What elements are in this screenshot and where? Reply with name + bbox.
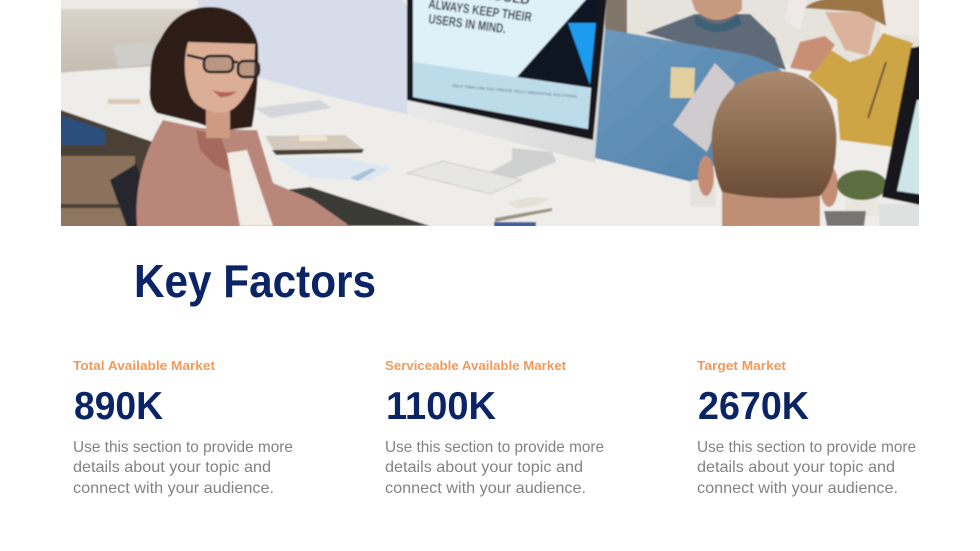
description: connect with your audience.: [385, 480, 586, 497]
chair: [110, 164, 140, 226]
column: target market: [697, 358, 916, 497]
description: Use this section to provide more: [73, 439, 293, 456]
label: Total Available Market: [73, 358, 216, 373]
label: Serviceable Available Market: [385, 358, 567, 373]
right monitor: [879, 45, 919, 226]
column: total available market: [73, 358, 293, 497]
pen cup: [690, 180, 716, 207]
description: Use this section to provide more: [697, 439, 916, 456]
column: serviceable available market: [385, 358, 604, 497]
value: 2670K: [698, 385, 809, 428]
woman with glasses: [137, 7, 350, 230]
desk surface: [61, 66, 152, 76]
sticky note: [670, 67, 695, 98]
description: [73, 439, 293, 497]
woman in yellow hoodie: [785, 0, 913, 147]
description: [697, 439, 916, 497]
description: details about your topic and: [697, 459, 895, 476]
description: Use this section to provide more: [385, 439, 604, 456]
folded cloth on shelf: [114, 42, 158, 68]
title: Key Factors: [134, 255, 376, 307]
patterned paper: [673, 63, 735, 152]
description: [385, 439, 604, 497]
desk plant: [824, 170, 887, 226]
value: 890K: [74, 385, 163, 428]
man in grey shirt: [645, 0, 786, 70]
man's head from behind: [698, 71, 838, 230]
photo: office team at desks: [55, 0, 925, 230]
desk papers and tablet: [108, 99, 392, 181]
label: Target Market: [697, 358, 787, 373]
keyboard and mouse: [407, 161, 552, 227]
computer monitor: ONLY THEN CAN YOU CREATE TRULY INNOVATIVE SOLUTIONS.: [452, 83, 578, 99]
description: connect with your audience.: [73, 480, 274, 497]
description: details about your topic and: [73, 459, 271, 476]
computer monitor: [407, 0, 607, 163]
lavender partition: [198, 0, 410, 115]
monitor stand: [490, 148, 556, 180]
value: 1100K: [386, 385, 496, 428]
description: connect with your audience.: [697, 480, 898, 497]
description: details about your topic and: [385, 459, 583, 476]
blue desk partition: [595, 29, 783, 184]
background wall: [55, 0, 925, 75]
under-desk drawers and binder: [61, 109, 152, 226]
computer monitor: USERS IN MIND.: [428, 11, 507, 36]
